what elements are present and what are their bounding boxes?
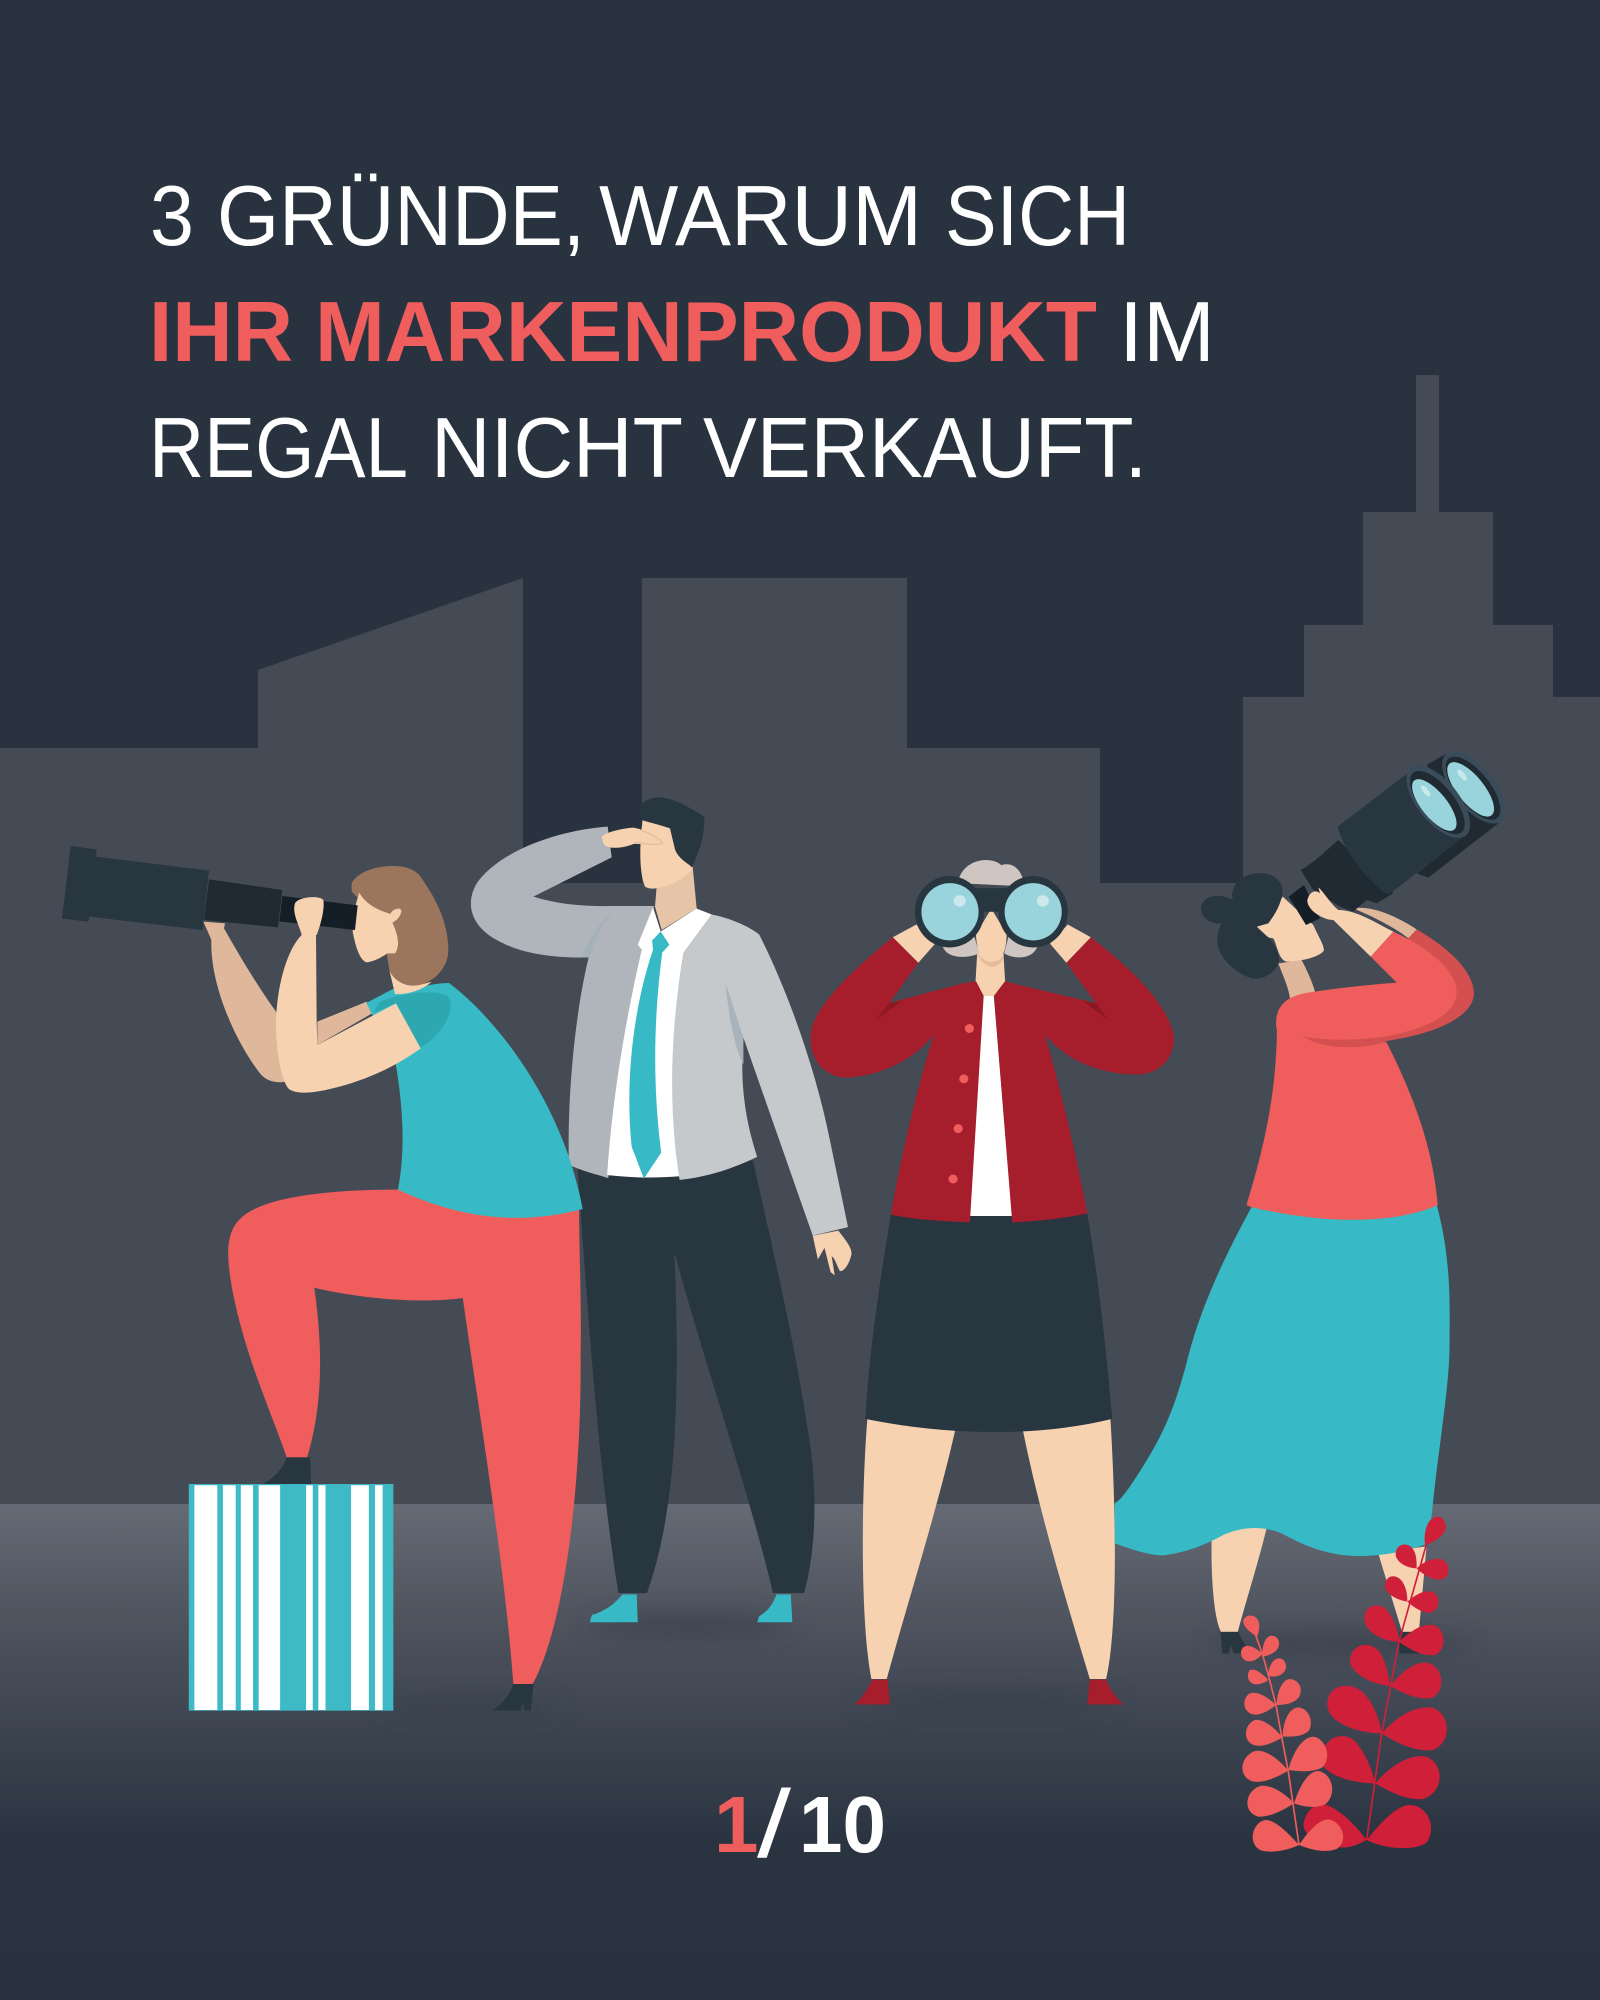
chin shadow [978, 953, 1004, 967]
slash: / [757, 1771, 791, 1878]
woman with telescope [62, 846, 583, 1711]
neck [976, 947, 1005, 996]
man body [569, 906, 848, 1622]
title line 1: GRÜNDE, [217, 169, 585, 264]
skirt [865, 1213, 1112, 1432]
jacket folds [876, 1001, 1109, 1020]
binoculars [915, 876, 1068, 947]
plant: dark red [1304, 1517, 1448, 1848]
man head and raised arm [471, 797, 704, 957]
title line 2 highlighted: IHR [149, 285, 293, 380]
title line 1 [150, 169, 1130, 264]
ground [0, 1504, 1600, 2000]
woman with binoculars in red jacket [811, 860, 1174, 1705]
trousers and top [228, 983, 583, 1711]
ground shadows [380, 1614, 1470, 1717]
title line 1: 3 [150, 169, 194, 264]
title line 3: NICHT [431, 401, 683, 496]
head, telescope and front arm [62, 846, 451, 1093]
hands [893, 925, 1091, 963]
red jacket [811, 937, 1174, 1222]
page counter [714, 1771, 886, 1878]
legs, skirt and body [1115, 1020, 1450, 1654]
title line 2 highlighted: MARKENPRODUKT [315, 285, 1097, 380]
current page number: 1 [714, 1780, 758, 1869]
title line 1: SICH [945, 169, 1130, 264]
title line 3: REGAL [149, 401, 408, 496]
man hand at side [813, 1231, 852, 1275]
title line 3: VERKAUFT. [703, 401, 1147, 496]
title line 1: WARUM [599, 169, 922, 264]
title line 2 end: IM [1119, 285, 1215, 380]
face [976, 909, 1007, 963]
legs [863, 1416, 1115, 1679]
title line 3 [149, 401, 1147, 496]
grey hair [943, 860, 1037, 957]
back arm [203, 922, 373, 1082]
city skyline silhouette [0, 375, 1600, 1510]
plant: coral [1241, 1615, 1343, 1852]
woman looking up through binoculars [1115, 740, 1518, 1654]
jacket buttons [948, 1024, 974, 1183]
total pages: 10 [799, 1780, 886, 1869]
barcode box [189, 1484, 393, 1711]
shoes [855, 1680, 1123, 1705]
title [149, 169, 1215, 496]
head, arm and large binoculars [1201, 740, 1518, 1047]
man shading his eyes [471, 797, 852, 1622]
blouse [970, 996, 1012, 1216]
